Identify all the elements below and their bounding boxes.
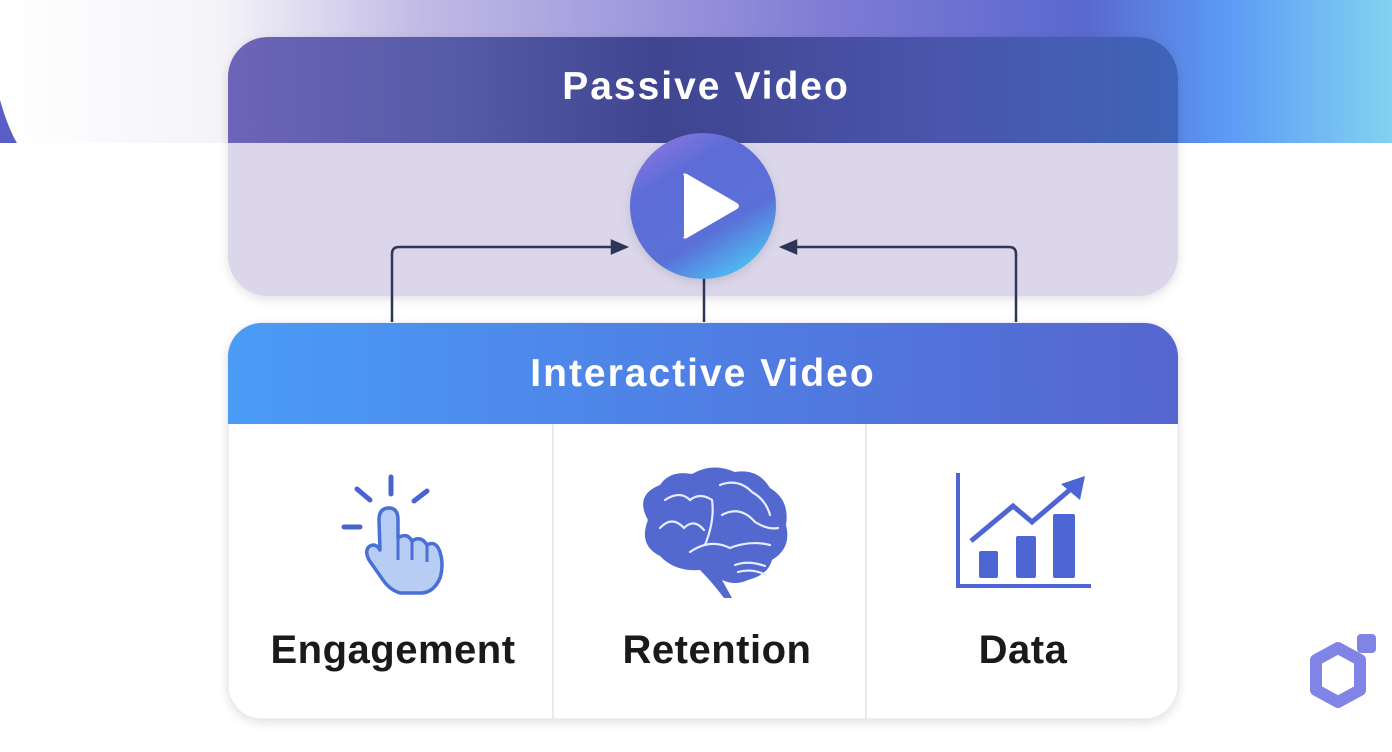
icon: logo [1316, 634, 1376, 702]
icon: play button [630, 133, 776, 279]
label: engagement: Engagement [270, 628, 516, 672]
arrows: connectors [392, 241, 1016, 322]
heading: interactive video: Interactive Video [530, 352, 876, 395]
label: retention: Retention [623, 628, 811, 672]
icon: hand tap [344, 477, 442, 593]
panel: passive video [228, 37, 1178, 296]
icon: brain [643, 467, 787, 598]
heading: passive video: Passive Video [562, 65, 850, 108]
panel: interactive video [228, 323, 1178, 719]
label: data: Data [979, 628, 1068, 672]
icon: bar chart [956, 473, 1091, 588]
background band [0, 0, 1392, 143]
